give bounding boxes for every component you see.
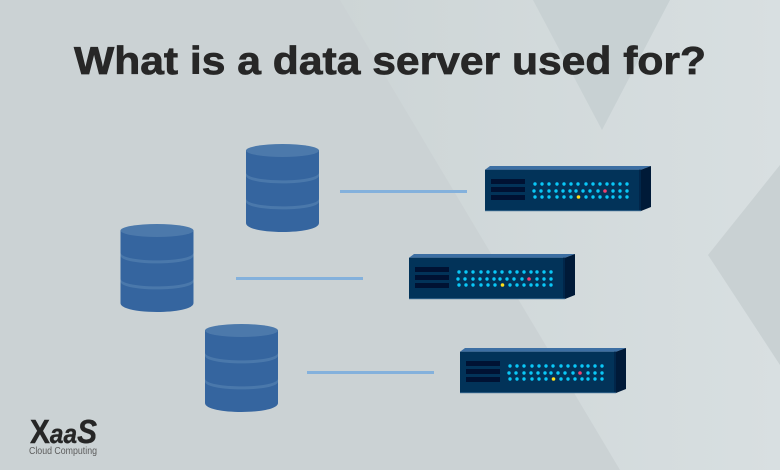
server: middle (409, 254, 575, 299)
logo: XaaS Cloud Computing: Cloud Computing (29, 445, 97, 457)
server: top (485, 166, 651, 211)
connector: middle (236, 277, 363, 280)
logo: XaaS Cloud Computing: XaaS (30, 413, 97, 450)
connector: bottom (307, 371, 434, 374)
database: top (246, 144, 319, 232)
database: bottom (205, 324, 278, 412)
server: bottom (460, 348, 626, 393)
database: middle (120, 224, 194, 312)
connector: top (340, 190, 467, 193)
title: What is a data server used for? (74, 40, 706, 83)
